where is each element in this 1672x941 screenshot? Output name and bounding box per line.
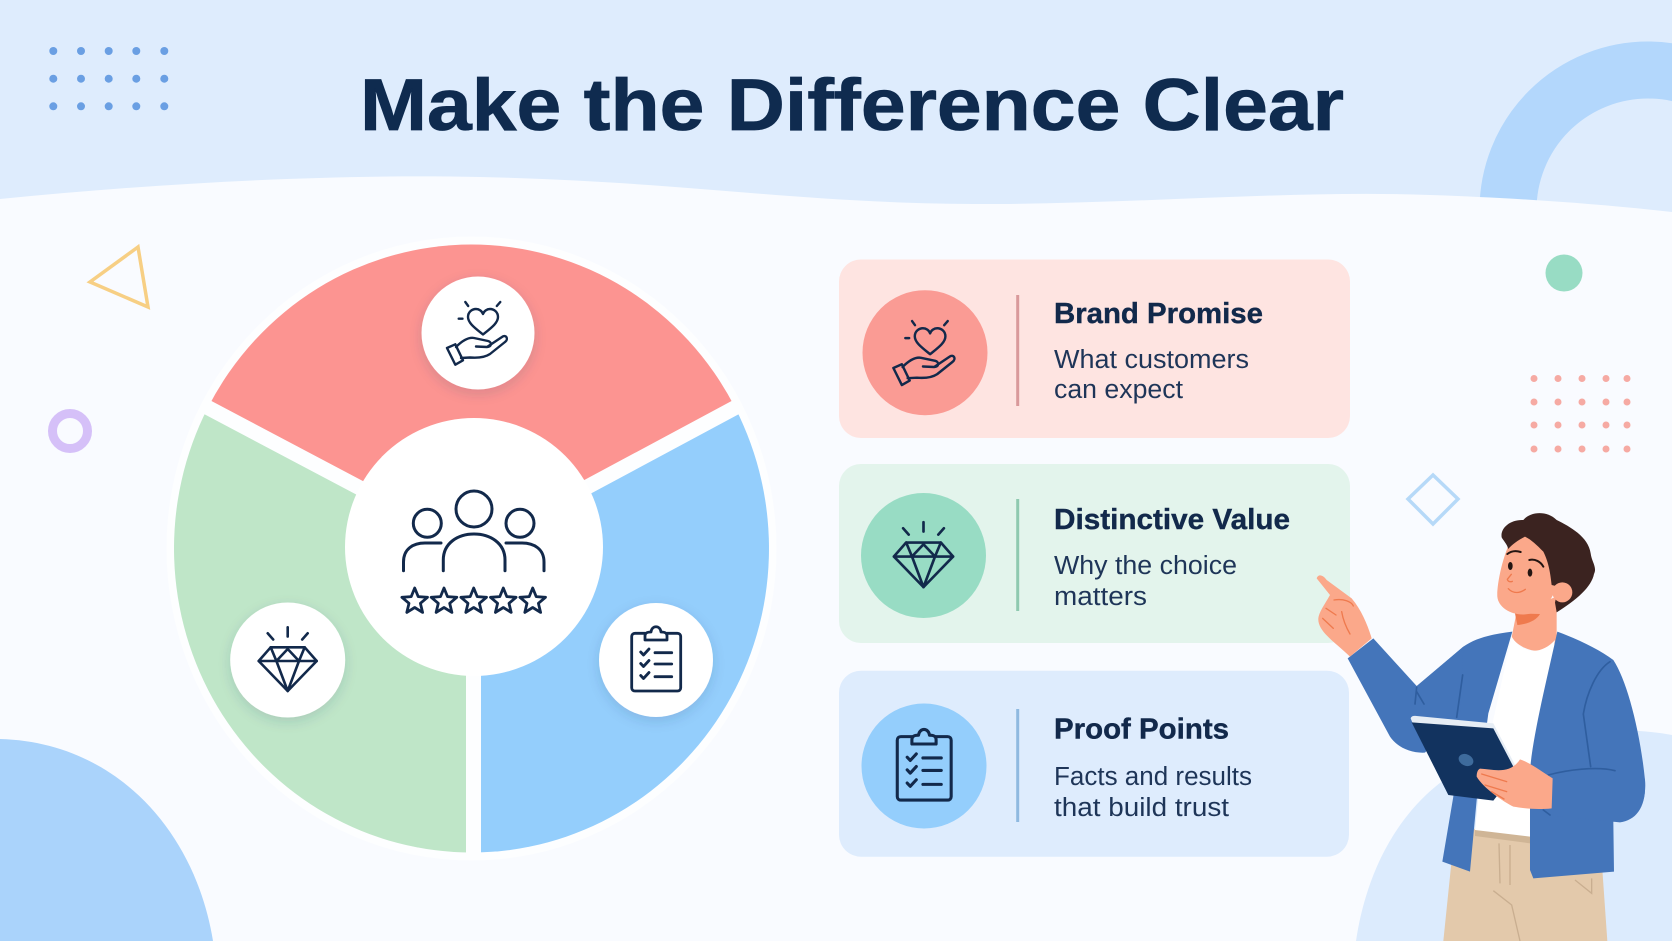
text: proof points description — [1054, 763, 1252, 822]
decoration: bottom-right circle — [1356, 731, 1672, 941]
text: proof points description: Facts and results — [1054, 763, 1252, 791]
segment: distinctive value — [174, 408, 473, 853]
illustration: person pointing while holding tablet — [1317, 513, 1645, 941]
tablet — [1411, 716, 1517, 773]
decoration: bottom-left circle — [0, 739, 213, 941]
pie chart — [166, 236, 776, 860]
pointing hand — [1317, 575, 1372, 657]
decoration: green dot — [1546, 254, 1582, 292]
text: brand promise description: can expect — [1054, 376, 1183, 404]
heading: distinctive value: Distinctive Value — [1054, 504, 1290, 536]
text: distinctive value description: Why the choice — [1054, 552, 1237, 580]
decoration: top-right arc — [1508, 70, 1672, 350]
ear — [1552, 582, 1572, 602]
decoration: purple ring — [52, 414, 88, 448]
heading: brand promise: Brand Promise — [1054, 298, 1263, 330]
nose and mouth — [1507, 574, 1525, 592]
face — [1497, 535, 1557, 614]
decoration: yellow triangle — [90, 247, 148, 307]
text: distinctive value description — [1054, 552, 1237, 611]
card: distinctive value — [839, 464, 1350, 643]
header background — [0, 0, 1672, 350]
icon badge: diamond — [230, 602, 345, 718]
jacket — [1348, 632, 1645, 878]
hair — [1501, 513, 1595, 612]
hand on tablet — [1477, 759, 1553, 809]
decoration: blue dot grid — [49, 47, 168, 110]
text: proof points description: that build trust — [1054, 794, 1229, 822]
shirt — [1475, 637, 1555, 837]
text: brand promise description: What customers — [1054, 346, 1249, 374]
text: distinctive value description: matters — [1054, 583, 1147, 611]
neck — [1512, 597, 1557, 651]
trousers — [1443, 828, 1607, 941]
icon badge: clipboard — [599, 603, 713, 717]
card: proof points — [839, 671, 1349, 857]
icon: diamond — [861, 493, 986, 618]
title: Make the Difference Clear — [360, 65, 1344, 146]
decoration: blue diamond outline — [1408, 475, 1458, 524]
card: brand promise — [839, 260, 1350, 438]
heading: proof points: Proof Points — [1054, 714, 1229, 746]
eyes and brows — [1508, 562, 1532, 577]
icon badge: heart in hand — [422, 276, 534, 390]
icon: heart in hand — [862, 290, 988, 415]
segment: proof points — [473, 408, 769, 852]
icon: people with star rating — [402, 491, 546, 612]
segment: brand promise — [208, 245, 735, 548]
decoration: pink dot grid — [1530, 375, 1630, 452]
centre hub — [345, 418, 603, 676]
icon: clipboard — [862, 704, 986, 828]
text: brand promise description — [1054, 346, 1249, 404]
